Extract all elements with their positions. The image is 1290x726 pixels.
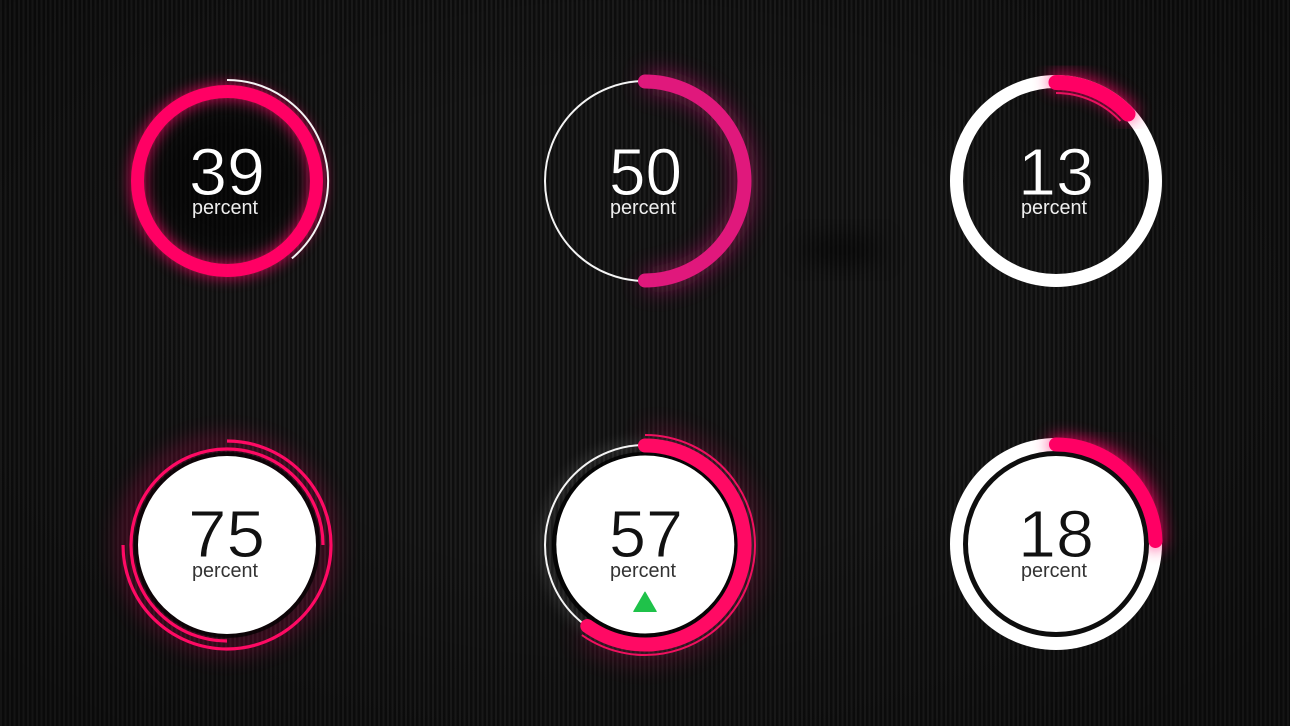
circle: thin white: [545, 81, 745, 281]
value: 13: 13: [1018, 135, 1094, 210]
arc: pink: [1056, 444, 1156, 541]
arc: magenta: [645, 82, 744, 280]
value: 75: 75: [188, 497, 265, 572]
ring: white: [956, 82, 1156, 280]
gauge: 13 percent: [956, 81, 1156, 281]
value: 18: 18: [1018, 497, 1094, 572]
circle: thin white: [545, 445, 745, 645]
arc: thin pink: [1056, 93, 1120, 121]
arc: thin white: [227, 80, 328, 258]
ring: pink: [138, 92, 316, 270]
value: 57: 57: [609, 497, 683, 572]
label: percent: percent: [192, 560, 258, 582]
arc: outer pink: [123, 441, 331, 649]
gauge: 39 percent: [138, 80, 328, 270]
background smudge: [800, 236, 884, 264]
label: percent: percent: [1021, 197, 1087, 219]
label: percent: percent: [1021, 560, 1087, 582]
gauge: 75 percent: [123, 441, 331, 649]
gauge: 57 percent: [545, 435, 755, 655]
disc: white: [556, 456, 734, 634]
value: 39: 39: [189, 135, 265, 210]
arc: inner pink: [131, 449, 323, 641]
gauge: 18 percent: [950, 438, 1162, 650]
value: 50: 50: [609, 135, 682, 210]
disc: white: [138, 456, 316, 634]
label: percent: percent: [192, 197, 258, 219]
label: percent: percent: [610, 197, 676, 219]
ring: black: [966, 454, 1146, 634]
ring: white: [950, 438, 1162, 650]
arc: pink: [587, 445, 745, 644]
arc: pink: [1056, 82, 1128, 114]
gauge: 50 percent: [545, 81, 745, 281]
icon: green up triangle: [634, 592, 656, 612]
arc: thin pink: [582, 435, 755, 655]
label: percent: percent: [610, 560, 676, 582]
